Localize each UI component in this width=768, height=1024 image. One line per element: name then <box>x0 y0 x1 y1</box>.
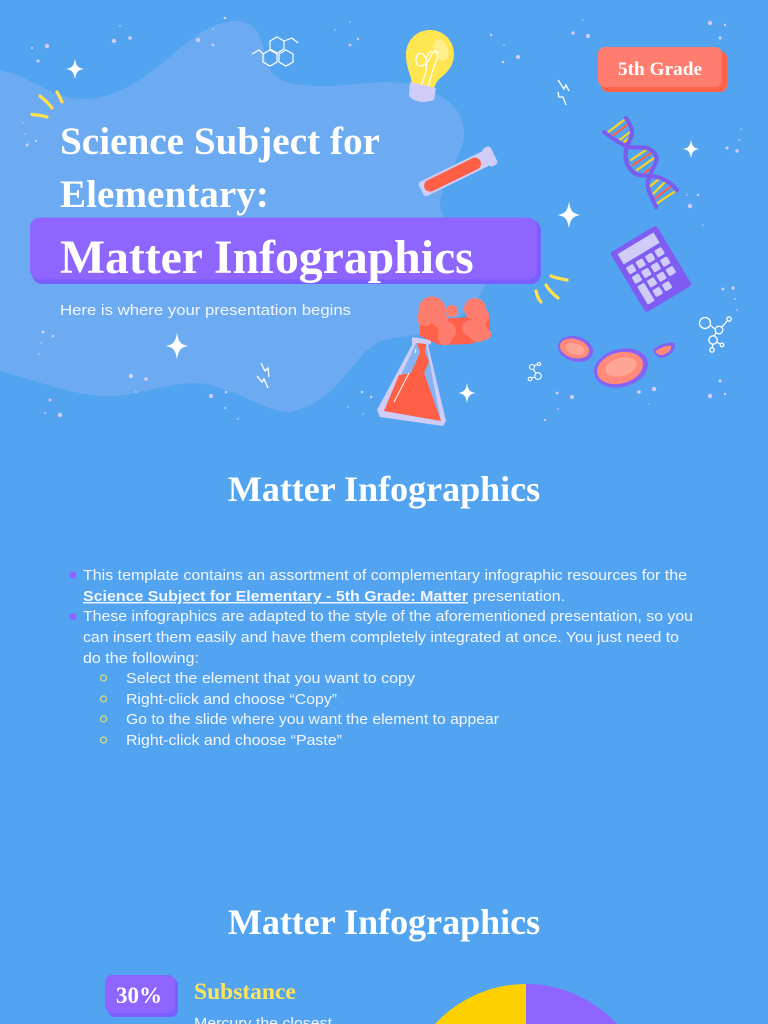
smoke <box>417 296 491 345</box>
second paragraph: do the following: <box>83 651 199 667</box>
icon: yellow burst left <box>32 92 62 117</box>
percentage badge <box>105 975 178 1017</box>
first paragraph: presentation. <box>473 589 565 605</box>
background blob <box>0 21 490 412</box>
percentage badge: 30% <box>116 983 162 1008</box>
section heading 2: Matter Infographics <box>228 902 540 942</box>
steps list: Right-click and choose “Copy” <box>126 692 337 708</box>
first paragraph: This template contains an assortment of complementary infographic resources for the <box>83 568 687 584</box>
section heading 1: Matter Infographics <box>228 469 540 509</box>
second paragraph: These infographics are adapted to the style of the aforementioned presentation, so you <box>83 609 693 625</box>
decorative dots <box>22 17 742 421</box>
bullet points <box>70 572 76 620</box>
flask liquid <box>384 343 441 421</box>
5th grade badge: 5th Grade <box>618 59 702 80</box>
steps list: Select the element that you want to copy <box>126 671 416 687</box>
title: Science Subject for Elementary: Science Subject for <box>60 120 380 163</box>
title banner: Matter Infographics <box>60 231 474 284</box>
subtitle: Here is where your presentation begins <box>60 303 351 319</box>
flask interior <box>384 343 441 421</box>
pie chart <box>435 984 617 1024</box>
icon: sparkles <box>66 58 699 403</box>
steps list <box>126 671 499 749</box>
first paragraph <box>83 568 687 605</box>
steps list: Right-click and choose “Paste” <box>126 733 342 749</box>
title block <box>30 120 541 319</box>
sub-bullets <box>100 675 106 743</box>
first paragraph: Science Subject for Elementary - 5th Grade: Matter <box>83 589 468 605</box>
icon: lightning bottom <box>257 363 269 388</box>
5th grade badge <box>598 47 727 92</box>
text block: instructions <box>70 568 693 749</box>
icon: test tube <box>417 145 498 199</box>
icon: cells <box>555 332 675 393</box>
cell left <box>555 332 596 366</box>
icon: light bulb <box>406 30 454 102</box>
icon: flask with smoke <box>377 296 491 426</box>
icon: calculator <box>610 225 692 313</box>
icon: molecule top <box>252 37 298 66</box>
steps list: Go to the slide where you want the element to appear <box>126 712 499 728</box>
icon: DNA helix <box>604 118 677 207</box>
cell right <box>653 343 675 358</box>
substance heading: Substance <box>194 979 296 1005</box>
second paragraph <box>83 609 693 667</box>
icon: lightning top <box>558 80 569 105</box>
icon: molecule right <box>700 317 731 352</box>
title banner <box>30 218 541 284</box>
flask glass <box>377 337 446 426</box>
cell centre <box>590 343 652 393</box>
title: Science Subject for Elementary: Elementary: <box>60 173 269 216</box>
second paragraph: can insert them easily and have them completely integrated at once. You just need to <box>83 630 679 646</box>
icon: yellow burst right <box>536 276 567 302</box>
icon: molecule small <box>528 362 541 381</box>
